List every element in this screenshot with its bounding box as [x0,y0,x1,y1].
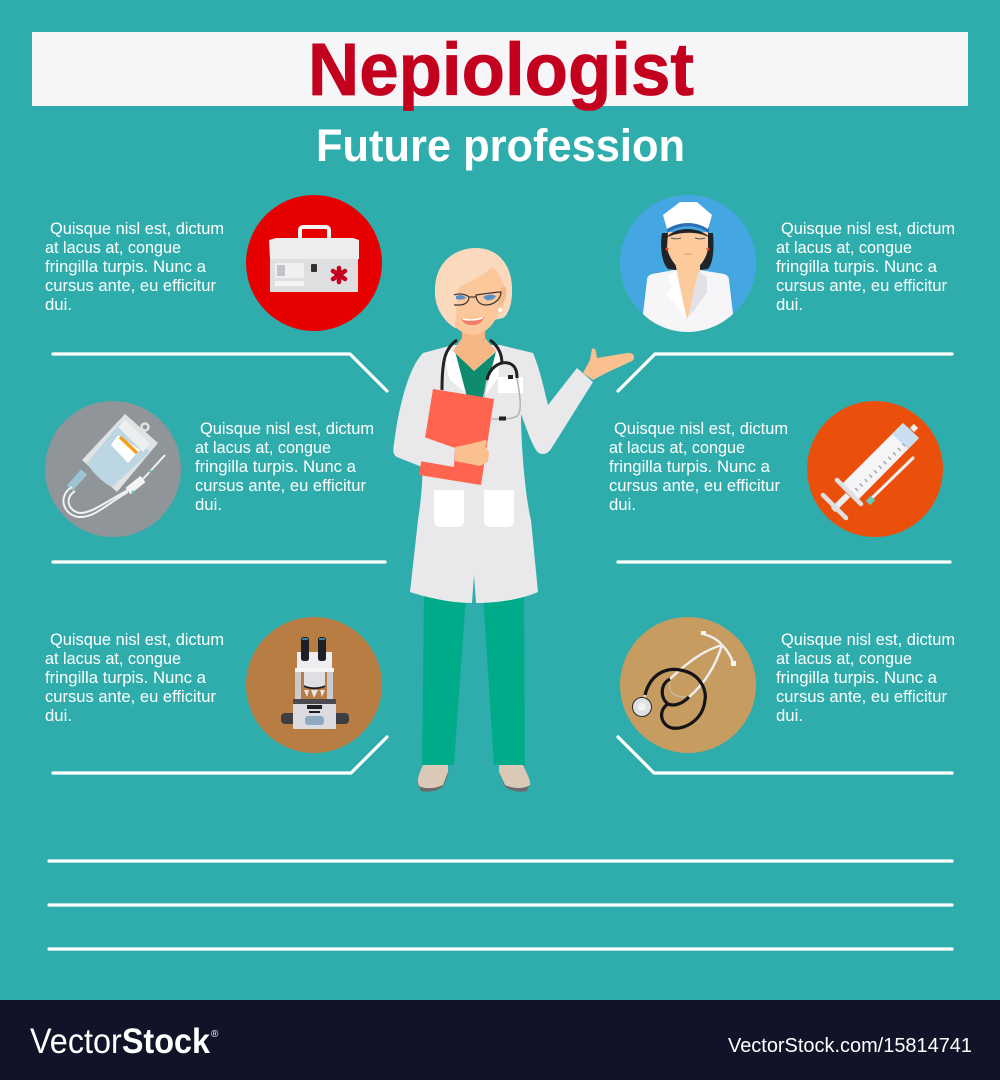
panel: top right text: cursus ante, eu efficitur [776,277,947,295]
panel: middle left text: dui. [195,496,222,514]
panel: middle left text: cursus ante, eu efficitur [195,477,366,495]
shoes [417,765,530,792]
panel: middle left text: at lacus at, congue [195,439,331,457]
icon: syringe [807,401,943,537]
panel: top right text: dui. [776,296,803,314]
panel: top left text: Quisque nisl est, dictum [50,220,224,238]
panel: top right text: fringilla turpis. Nunc a [776,258,938,276]
watermark bar [0,1000,1000,1080]
panel: top left text [45,220,224,314]
subtitle: Future profession [316,120,685,171]
watermark bar: VectorStock.com/15814741 [728,1035,972,1057]
neck [453,330,496,371]
watermark bar: ® [211,1029,219,1040]
panel: bottom right text: Quisque nisl est, dictum [781,631,955,649]
coat pockets [434,490,514,527]
icon: microscope [246,617,382,753]
panel: middle left text: fringilla turpis. Nunc a [195,458,357,476]
lab coat [393,345,593,603]
panel: middle left text: Quisque nisl est, dictum [200,420,374,438]
panel: bottom left text: at lacus at, congue [45,650,181,668]
panel: bottom left text: dui. [45,707,72,725]
stethoscope on neck [442,340,520,420]
panel: middle left text [195,420,374,514]
panel: top right text [776,220,955,314]
panel: bottom left text [45,631,224,725]
panel: bottom right text: at lacus at, congue [776,650,912,668]
panel: top left text: cursus ante, eu efficitur [45,277,216,295]
panel: middle right text: dui. [609,496,636,514]
panel: middle right text: at lacus at, congue [609,439,745,457]
panel: top right text: Quisque nisl est, dictum [781,220,955,238]
watermark bar: VectorStock [30,1022,210,1061]
hand raised [583,348,634,380]
panel: middle right text: Quisque nisl est, dictum [614,420,788,438]
trousers [422,595,525,765]
panel: middle right text: fringilla turpis. Nunc a [609,458,771,476]
panel: top left text: fringilla turpis. Nunc a [45,258,207,276]
icon: first aid kit [246,195,382,331]
panel: bottom right text: fringilla turpis. Nunc a [776,669,938,687]
head [435,248,512,335]
panel: middle right text: cursus ante, eu efficitur [609,477,780,495]
clipboard [419,389,494,485]
figure: doctor [393,248,634,792]
collar and lapels [445,347,466,393]
panel: bottom right text: dui. [776,707,803,725]
breast pocket [498,377,523,393]
hand holding clipboard [455,440,489,466]
panel: bottom right text: cursus ante, eu efficitur [776,688,947,706]
title band [32,28,968,111]
panel: middle right text [609,420,788,514]
panel: bottom left text: cursus ante, eu efficitur [45,688,216,706]
scrub top [455,351,497,397]
panel: bottom right text [776,631,955,725]
glasses [454,292,501,305]
title band: Nepiologist [308,28,694,111]
panel: top left text: dui. [45,296,72,314]
panel: bottom left text: Quisque nisl est, dictum [50,631,224,649]
icon: IV drip bag [45,401,181,537]
coat sleeve over clipboard [393,420,455,467]
icon: nurse portrait [620,195,756,332]
right lapel [484,347,501,397]
panel: top right text: at lacus at, congue [776,239,912,257]
panel: top left text: at lacus at, congue [45,239,181,257]
icon: stethoscope [620,617,756,753]
panel: bottom left text: fringilla turpis. Nunc a [45,669,207,687]
